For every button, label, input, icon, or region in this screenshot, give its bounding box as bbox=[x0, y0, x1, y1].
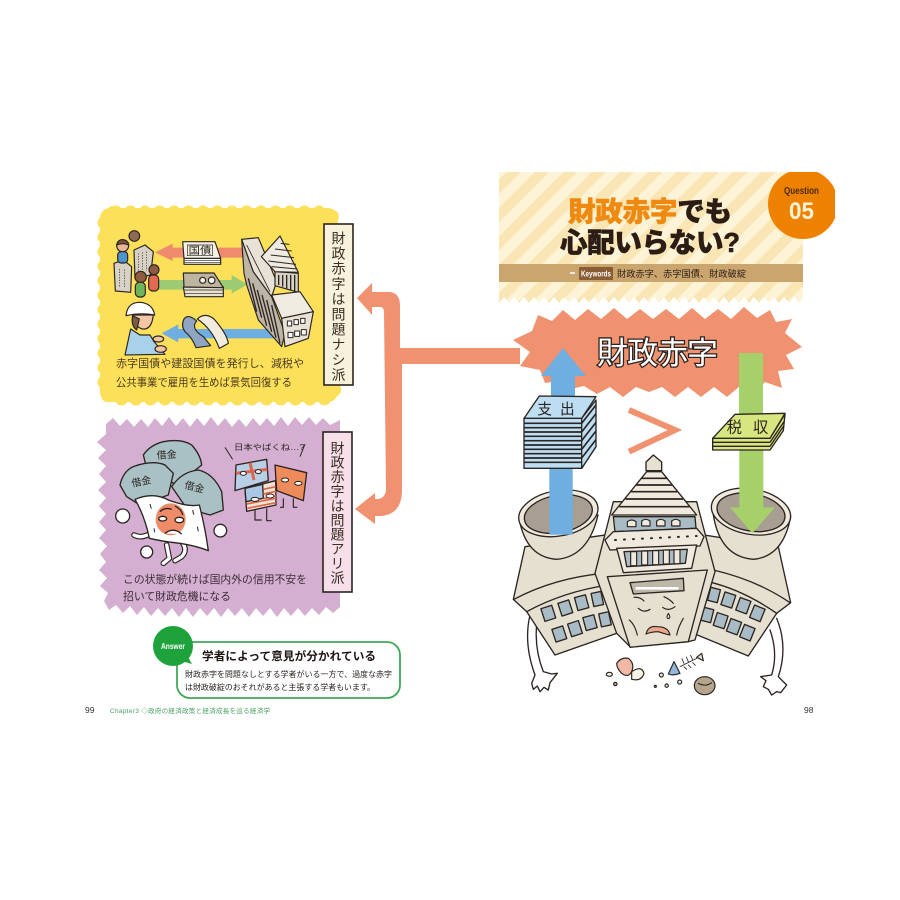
icon: tax revenue stack bbox=[713, 413, 785, 450]
band: keywords: Keywords bbox=[581, 270, 611, 278]
footer: chapter title: Chapter3 ◇政府の経済政策と経済成長を巡る経済学 bbox=[110, 706, 270, 715]
badge: question 05: Question bbox=[784, 186, 819, 197]
sign: problem school bbox=[323, 432, 352, 592]
icon: sweat puffs bbox=[116, 509, 227, 558]
heading: title line two: 心配いらない? bbox=[560, 227, 740, 258]
icon: debt rocks: 借金 bbox=[156, 448, 177, 462]
character: worried bond paper bbox=[134, 496, 208, 563]
icon: debt rocks: 借金 bbox=[183, 478, 206, 496]
icon: parliament building bbox=[242, 236, 313, 347]
speech: Japan is in trouble bbox=[225, 442, 305, 459]
arrow: green tax arrow shaft bbox=[739, 353, 763, 423]
icon: government bonds: 国債 bbox=[189, 244, 211, 257]
icon: right bowl with incoming green arrow bbox=[708, 433, 794, 559]
illustration: money flow between government and people bbox=[114, 231, 313, 355]
icon: debt rocks bbox=[120, 441, 223, 515]
icon: right wing bbox=[693, 533, 791, 695]
icon: left bowl with outgoing blue arrow bbox=[515, 467, 602, 559]
illustration: debt rocks crushing bond character bbox=[116, 441, 307, 563]
sign: no problem school bbox=[324, 224, 353, 385]
badge: question 05: 05 bbox=[789, 198, 814, 225]
text: yellow panel caption: 赤字国債や建設国債を発行し、減税や bbox=[116, 356, 304, 370]
arrow: blue spending arrow head bbox=[541, 348, 586, 400]
text: answer body bbox=[185, 669, 392, 692]
band: keywords: 財政赤字、赤字国債、財政破綻 bbox=[617, 268, 746, 279]
icon: flag characters bbox=[235, 459, 307, 521]
icon: construction worker bbox=[125, 302, 166, 355]
arrow: connector splitting to both schools bbox=[355, 283, 520, 524]
icon: central tower bbox=[595, 455, 715, 647]
icon: debt rocks: 借金 bbox=[130, 473, 152, 490]
footer: left page number: 99 bbox=[85, 705, 95, 715]
icon: crumbs on the floor bbox=[606, 653, 715, 695]
icon: government bonds bbox=[183, 242, 221, 264]
heading: deficit burst label: 財政赤字 bbox=[597, 336, 718, 371]
icon: spending stack bbox=[524, 396, 596, 468]
panel: title block bbox=[499, 172, 803, 303]
icon: answer badge bbox=[153, 626, 193, 666]
text: answer body: は財政破綻のおそれがあると主張する学者もいます。 bbox=[185, 682, 375, 692]
icon: greater-than sign bbox=[629, 410, 675, 452]
speech: Japan is in trouble: 日本やばくね…? bbox=[234, 442, 305, 452]
panel: purple problem school bbox=[97, 417, 340, 617]
panel: yellow no-problem school bbox=[100, 208, 338, 402]
icon: tax revenue stack: 税収 bbox=[727, 419, 768, 436]
icon: left wing bbox=[513, 533, 617, 692]
text: purple panel caption: この状態が続けば国内外の信用不安を bbox=[123, 572, 307, 586]
icon: answer badge: Answer bbox=[161, 641, 186, 651]
arrow: blue public works arrow bbox=[162, 324, 280, 342]
icon: people and houses bbox=[114, 231, 159, 297]
icon: spending stack: 支出 bbox=[537, 401, 575, 418]
badge: question 05 bbox=[768, 169, 838, 239]
heading: title line one: 財政赤字でも bbox=[568, 196, 732, 227]
text: purple panel caption: 招いて財政危機になる bbox=[123, 589, 231, 603]
sign: no problem school: 財政赤字は問題ナシ派 bbox=[330, 231, 346, 383]
icon: sad face bbox=[607, 570, 707, 647]
text: yellow panel caption: 公共事業で雇用を生めば景気回復する bbox=[116, 375, 292, 389]
heading: answer headline: 学者によって意見が分かれている bbox=[202, 649, 376, 663]
text: purple panel caption bbox=[123, 572, 307, 603]
icon: road bbox=[183, 315, 228, 348]
sign: problem school: 財政赤字は問題アリ派 bbox=[330, 441, 346, 585]
arrow: green cash arrow bbox=[157, 275, 247, 294]
icon: cash stack bbox=[183, 273, 223, 297]
band: keywords bbox=[499, 264, 803, 282]
text: yellow panel caption bbox=[116, 356, 304, 389]
illustration: sad parliament building bbox=[513, 410, 794, 695]
footer: right page number: 98 bbox=[804, 705, 814, 715]
arrow: red bond arrow bbox=[155, 244, 247, 261]
text: answer body: 財政赤字を問題なしとする学者がいる一方で、過度な赤字 bbox=[185, 669, 392, 679]
panel: deficit burst bbox=[513, 307, 802, 397]
panel: answer box bbox=[153, 626, 400, 698]
